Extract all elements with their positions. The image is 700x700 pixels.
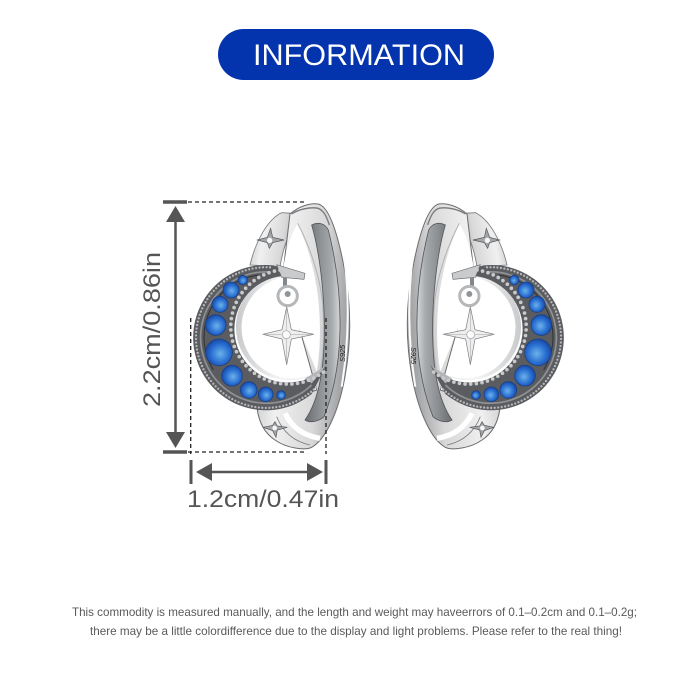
disclaimer text: This commodity is measured manually, and the length and weight may haveerrors of 0.1–0.2cm and 0.1–0.2g; — [72, 605, 637, 619]
small star on upper band — [257, 228, 284, 248]
height dimension — [163, 202, 305, 452]
disclaimer text: there may be a little colordifference due to the display and light problems. Please refer to the real thing! — [90, 624, 622, 638]
hanging star charm — [263, 277, 314, 365]
moon inner rim — [236, 274, 327, 380]
title button — [218, 29, 494, 80]
width label: 1.2cm/0.47in — [187, 486, 339, 513]
S925 stamp right: S925 — [409, 347, 418, 365]
crescent moon body — [193, 265, 327, 410]
width dimension — [191, 318, 326, 484]
right earring — [407, 204, 564, 449]
left earring — [193, 204, 350, 449]
disclaimer text — [72, 605, 637, 638]
height label: 2.2cm/0.86in — [139, 252, 166, 407]
blue gems — [205, 275, 285, 402]
small star on lower band — [263, 422, 287, 437]
S925 stamp left: S925 — [338, 344, 347, 362]
title button: INFORMATION — [253, 39, 465, 72]
